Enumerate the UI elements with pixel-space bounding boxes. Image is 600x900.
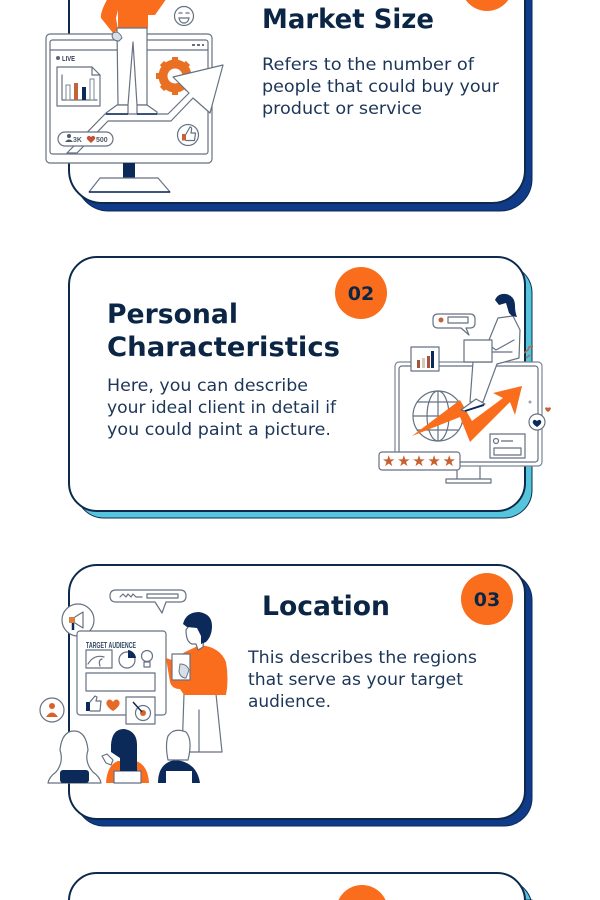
man figure [101,0,167,114]
speech bubble [433,314,475,335]
monitor [395,362,542,483]
icon: thumbs up [178,124,198,146]
target audience board [77,631,166,724]
description: market size: people that could buy your [262,77,499,96]
description: market size: product or service [262,99,422,118]
bar chart document [57,67,100,106]
description: market size: Refers to the number of [262,55,475,74]
number badge 03: 03 [474,589,500,611]
description: personal characteristics: your ideal client in detail if [107,398,337,417]
description: personal characteristics: you could paint a picture. [107,420,331,439]
panel: location card [40,565,532,826]
icon: heart badge [529,414,545,430]
audience member right [158,730,200,783]
growth arrow [67,65,223,153]
shoe [461,399,485,411]
description: location [247,648,477,711]
heading: personal characteristics: Personal [107,299,238,330]
woman figure [464,294,520,402]
description: personal characteristics [107,376,337,439]
illustration: presentation to audience [40,590,228,783]
audience member left [48,731,101,783]
globe [413,391,463,441]
panel: personal characteristics card [69,257,551,518]
heading: market size: Market Size [262,4,434,35]
social stats pill: 3K [73,137,82,144]
icon: smiley [174,6,194,26]
description: market size [262,55,499,118]
number badge 04 [336,885,388,900]
icon: user circle [40,698,64,722]
presenter figure [166,612,228,752]
panel: fourth card top [69,873,532,900]
description: personal characteristics: Here, you can describe [107,376,308,395]
chart box [411,347,439,371]
leaves accent [524,346,533,358]
number badge 01 [461,0,513,11]
live label [56,54,75,63]
illustration: man on monitor [46,0,223,192]
number badge 02: 02 [348,283,374,305]
description: location: This describes the regions [247,648,477,667]
icon: megaphone [62,604,94,636]
social stats pill [58,132,113,146]
small heart [545,407,551,412]
number badge 03 [461,573,513,625]
growth arrow [412,386,522,442]
panel: market size card [46,0,532,211]
description: location: that serve as your target [248,670,464,689]
description: location: audience. [248,692,331,711]
rating stars: ★★★★★ [382,453,456,470]
target audience board: TARGET AUDIENCE [86,641,136,650]
illustration: woman on monitor [379,294,551,483]
heading: personal characteristics: Characteristics [107,332,340,363]
heading: location: Location [262,591,390,622]
info card [490,434,525,458]
monitor [46,34,212,192]
live label: LIVE [62,54,75,63]
audience member middle [102,729,149,783]
social stats pill: 500 [96,137,108,144]
speech bubble [110,590,186,613]
icon: gear [156,57,194,95]
heading: personal characteristics [107,299,340,363]
number badge 02 [335,267,387,319]
